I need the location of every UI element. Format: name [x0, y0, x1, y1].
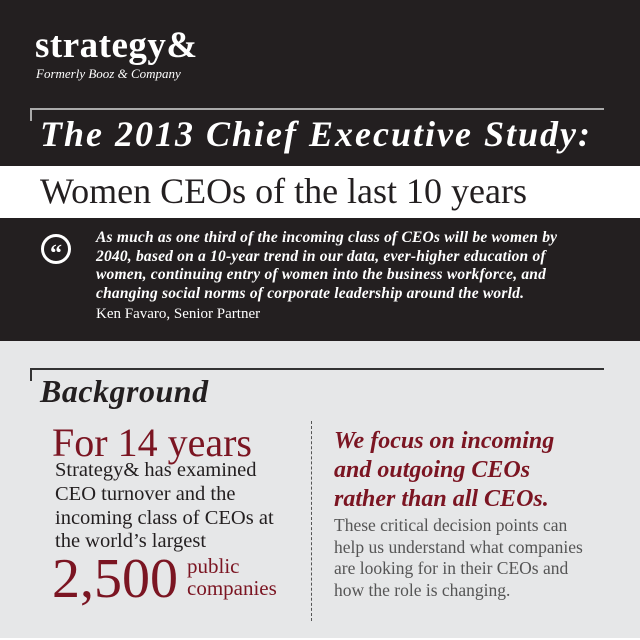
panel: header dark: [0, 0, 640, 341]
right text block: These critical decision points can: [334, 515, 567, 535]
left text block: public: [187, 554, 240, 578]
icon: quote: [41, 234, 71, 264]
logo subtitle: Formerly Booz & Company: [36, 66, 181, 81]
right text block: and outgoing CEOs: [334, 457, 530, 483]
quote attribution: Ken Favaro, Senior Partner: [96, 306, 260, 322]
icon: quote: “: [50, 241, 62, 267]
quote text: changing social norms of corporate leadership around the world.: [96, 284, 524, 302]
left text block: companies: [187, 576, 277, 600]
left text block: incoming class of CEOs at: [55, 507, 274, 529]
quote text: women, continuing entry of women into the business workforce, and: [96, 266, 546, 283]
right text block: help us understand what companies: [334, 537, 583, 557]
title: The 2013 Chief Executive Study:: [40, 114, 592, 154]
left text block: CEO turnover and the: [55, 483, 235, 505]
left text block: For 14 years: [52, 420, 252, 465]
right text block: We focus on incoming: [334, 428, 554, 454]
logo: strategy&: [35, 25, 198, 66]
quote text: 2040, based on a 10-year trend in our data, ever-higher education of: [96, 248, 546, 264]
left text block: [52, 420, 277, 610]
quote text: As much as one third of the incoming class of CEOs will be women by: [96, 229, 557, 246]
heading: Background: Background: [40, 373, 209, 409]
left text block: Strategy& has examined: [55, 459, 257, 481]
panel: background: [0, 341, 640, 638]
right text block: are looking for in their CEOs and: [334, 558, 568, 578]
right text block: rather than all CEOs.: [334, 486, 549, 512]
left text block: 2,500: [52, 548, 178, 610]
left text block: the world’s largest: [55, 530, 206, 552]
subtitle band: [0, 166, 640, 218]
subtitle band: Women CEOs of the last 10 years: [40, 171, 527, 211]
quote text: [95, 229, 557, 302]
right text block: how the role is changing.: [334, 580, 510, 600]
right text block: [334, 428, 583, 600]
